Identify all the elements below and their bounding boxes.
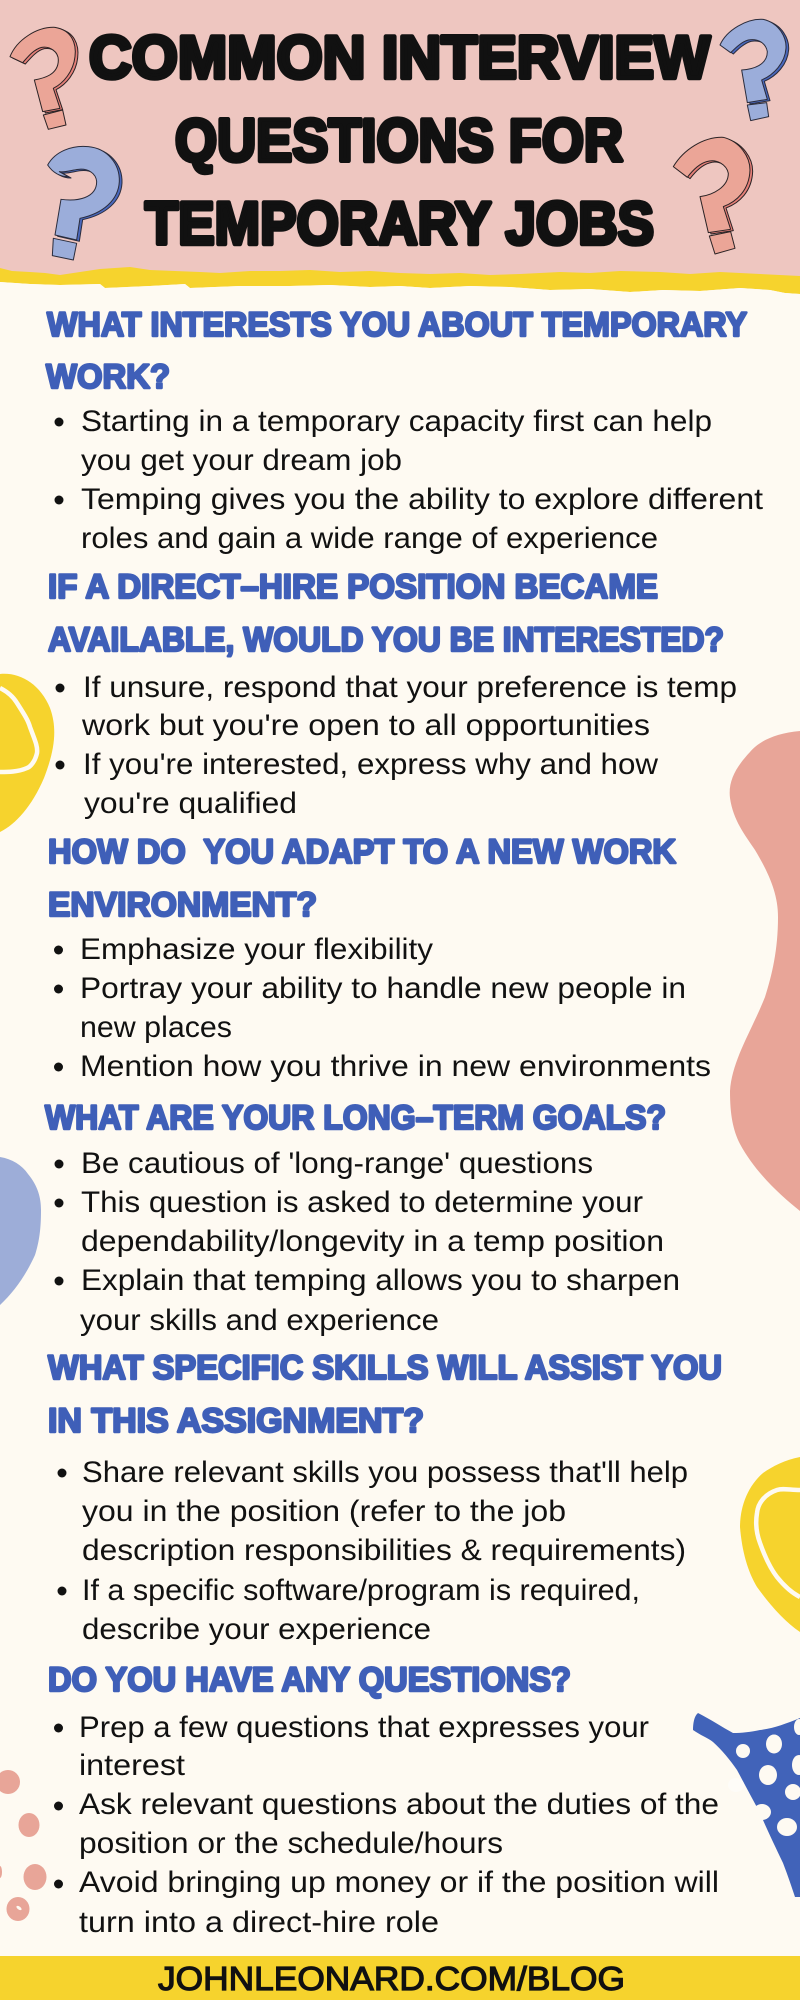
section 3 heading <box>48 833 676 924</box>
section 5 bullet list: describe your experience <box>82 1613 431 1646</box>
torn yellow band <box>0 267 800 294</box>
section 4 bullet list: Be cautious of 'long-range' questions <box>81 1147 593 1180</box>
section 4 bullet list <box>54 1147 680 1337</box>
section 2 bullet list: you're qualified <box>84 787 297 820</box>
section 3 bullet list <box>54 933 711 1083</box>
section 5 heading <box>48 1349 722 1440</box>
section 3 heading: HOW DO YOU ADAPT TO A NEW WORK <box>48 833 676 871</box>
section 2 bullet list <box>56 671 737 820</box>
section 4 bullet list: Explain that temping allows you to sharpen <box>81 1264 680 1297</box>
decorative blob: salmon right <box>730 731 800 1211</box>
section 1 heading: WORK? <box>46 358 170 396</box>
title: TEMPORARY JOBS <box>145 190 654 257</box>
section 2 heading: AVAILABLE, WOULD YOU BE INTERESTED? <box>48 621 724 659</box>
section 1 bullet list: Starting in a temporary capacity first can help <box>81 405 712 438</box>
section 4 bullet list: This question is asked to determine your <box>81 1186 643 1219</box>
title: QUESTIONS FOR <box>175 107 623 174</box>
section 3 bullet list: new places <box>80 1011 232 1044</box>
header panel: pink background <box>0 0 800 280</box>
section 6 heading: DO YOU HAVE ANY QUESTIONS? <box>48 1661 571 1699</box>
section 6 bullet list: Ask relevant questions about the duties of the <box>79 1788 719 1821</box>
section 1 bullet list: you get your dream job <box>81 444 402 477</box>
section 6 bullet list: Avoid bringing up money or if the position will <box>79 1866 719 1899</box>
cream body below the band <box>0 282 800 330</box>
decorative dots: salmon left <box>0 1770 46 1921</box>
section 3 bullet list: Portray your ability to handle new people in <box>80 972 686 1005</box>
section 6 bullet list: turn into a direct-hire role <box>79 1906 439 1939</box>
section 6 bullet list: interest <box>79 1749 185 1782</box>
section 6 bullet list: Prep a few questions that expresses your <box>79 1711 649 1744</box>
section 3 heading: ENVIRONMENT? <box>48 886 317 924</box>
decorative blob: yellow left <box>0 674 54 832</box>
footer bar <box>0 1956 800 2000</box>
section 1 heading: WHAT INTERESTS YOU ABOUT TEMPORARY <box>47 306 747 344</box>
icon: pink question mark top left <box>10 27 78 129</box>
section 3 bullet list: Emphasize your flexibility <box>80 933 433 966</box>
section 5 heading: IN THIS ASSIGNMENT? <box>48 1402 424 1440</box>
section 3 bullet list: Mention how you thrive in new environments <box>80 1050 711 1083</box>
section 6 bullet list <box>54 1711 719 1939</box>
decorative shape: blue with dots <box>693 1713 800 1897</box>
section 2 heading <box>48 568 724 659</box>
section 4 bullet list: your skills and experience <box>80 1304 439 1337</box>
section 4 heading: WHAT ARE YOUR LONG–TERM GOALS? <box>45 1099 666 1137</box>
section 1 bullet list <box>54 405 763 555</box>
title: COMMON INTERVIEW <box>89 24 710 91</box>
section 5 bullet list: If a specific software/program is required, <box>82 1574 640 1607</box>
section 2 bullet list: If you're interested, express why and how <box>83 748 659 781</box>
icon: blue question mark left <box>48 146 122 260</box>
section 5 bullet list <box>58 1456 688 1646</box>
icon: blue question mark top right <box>720 19 789 121</box>
footer url: JOHNLEONARD.COM/BLOG <box>158 1960 625 1997</box>
section 1 bullet list: roles and gain a wide range of experience <box>81 522 658 555</box>
section 6 bullet list: position or the schedule/hours <box>79 1827 503 1860</box>
section 4 bullet list: dependability/longevity in a temp position <box>81 1225 664 1258</box>
decorative blob: yellow right <box>740 1457 800 1632</box>
section 2 bullet list: work but you're open to all opportunities <box>81 709 650 742</box>
section 2 heading: IF A DIRECT–HIRE POSITION BECAME <box>48 568 658 606</box>
section 1 bullet list: Temping gives you the ability to explore different <box>81 483 763 516</box>
section 5 bullet list: description responsibilities & requirements) <box>82 1534 686 1567</box>
section 5 bullet list: Share relevant skills you possess that'll help <box>82 1456 688 1489</box>
title <box>89 24 710 257</box>
section 5 heading: WHAT SPECIFIC SKILLS WILL ASSIST YOU <box>48 1349 722 1387</box>
section 1 heading <box>46 306 747 396</box>
section 2 bullet list: If unsure, respond that your preference is temp <box>83 671 737 704</box>
icon: pink question mark right <box>673 137 753 254</box>
decorative blob: blue left <box>0 1157 41 1305</box>
section 5 bullet list: you in the position (refer to the job <box>82 1495 566 1528</box>
